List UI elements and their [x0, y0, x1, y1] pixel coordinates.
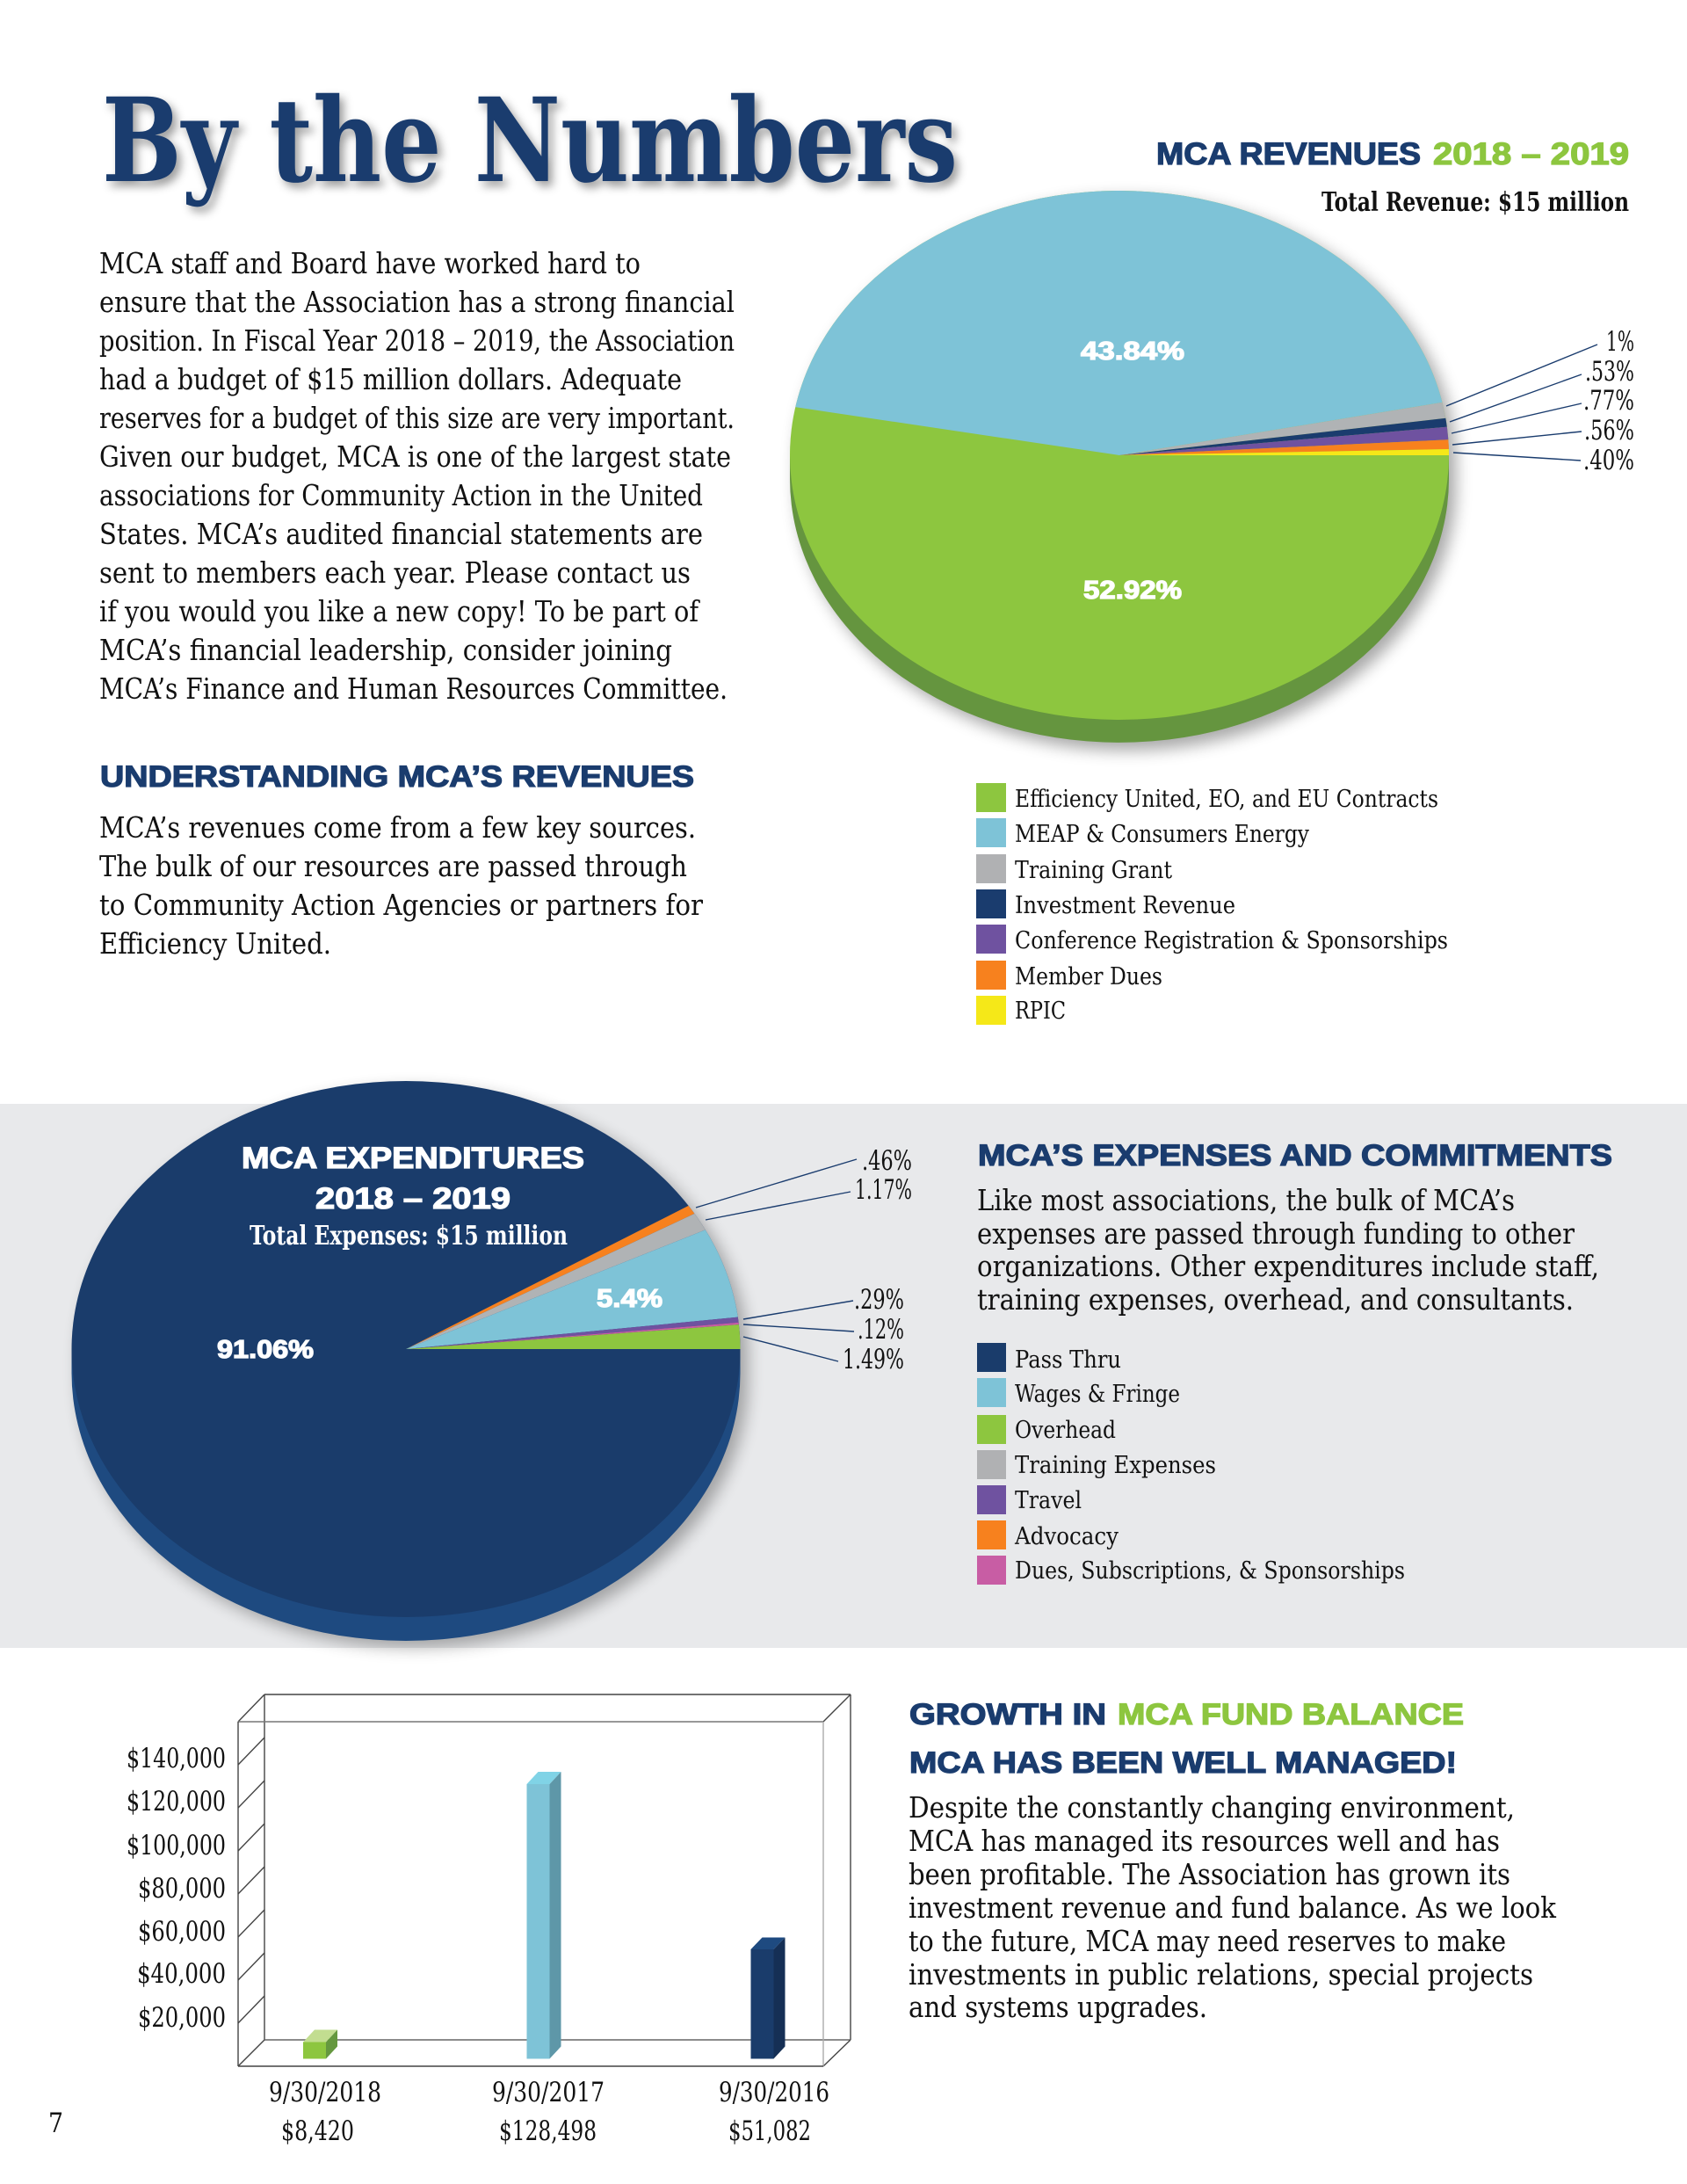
text block: intro: MCA staff and Board have worked hard to — [99, 246, 641, 280]
heading: growth in fund balance: MCA FUND BALANCE — [1118, 1698, 1464, 1731]
chart: expenditures pie — [72, 1081, 844, 1648]
heading: understanding revenues: UNDERSTANDING MCA’S REVENUES — [100, 760, 694, 794]
legend: revenues — [976, 783, 1448, 1025]
text block: intro: associations for Community Action in the United — [99, 478, 703, 512]
axis labels: dates and amounts: $128,498 — [499, 2116, 597, 2147]
legend: expenditures: Wages & Fringe — [1015, 1381, 1180, 1408]
text block: expenses: expenses are passed through funding to other — [977, 1217, 1575, 1251]
callouts: revenue small slices: .77% — [1583, 386, 1634, 417]
text block: growth: to the future, MCA may need reserves to make — [909, 1925, 1506, 1958]
text block: intro: reserves for a budget of this size are very important. — [99, 401, 735, 435]
text block: intro: Given our budget, MCA is one of the largest state — [99, 439, 731, 474]
heading: growth in fund balance: MCA HAS BEEN WELL MANAGED! — [909, 1746, 1457, 1780]
legend: expenditures: Training Expenses — [1015, 1452, 1216, 1479]
legend: expenditures: Dues, Subscriptions, & Sponsorships — [1015, 1557, 1405, 1585]
legend: expenditures: Pass Thru — [1015, 1346, 1121, 1374]
text block: intro: position. In Fiscal Year 2018 – 2019, the Association — [99, 323, 735, 358]
legend: revenues: MEAP & Consumers Energy — [1015, 821, 1310, 848]
text block: growth: been profitable. The Association has grown its — [909, 1858, 1510, 1891]
callouts: expenditure small slices: 1.49% — [843, 1345, 904, 1375]
axis labels: dates and amounts: 9/30/2018 — [269, 2078, 381, 2108]
text block: growth: Despite the constantly changing environment, — [909, 1791, 1515, 1825]
axis labels: dates and amounts: 9/30/2016 — [719, 2078, 829, 2108]
label: 91.06 percent: 91.06% — [217, 1336, 314, 1364]
legend: revenues: Training Grant — [1015, 857, 1172, 884]
callouts: expenditure small slices: .29% — [854, 1285, 904, 1316]
axis labels: dollar values: $80,000 — [138, 1874, 226, 1905]
text block: intro — [99, 246, 735, 706]
label: 5.4 percent: 5.4% — [597, 1285, 662, 1313]
axis labels: dates and amounts: $51,082 — [728, 2116, 811, 2147]
axis labels: dates and amounts — [269, 2078, 829, 2147]
label: 43.84 percent: 43.84% — [1081, 337, 1184, 366]
legend: revenues: Member Dues — [1015, 963, 1162, 990]
chart: fund balance 3D bar chart — [127, 1694, 851, 2147]
legend: revenues: Conference Registration & Sponsorships — [1015, 927, 1448, 954]
heading: expenses and commitments: MCA’S EXPENSES AND COMMITMENTS — [978, 1139, 1612, 1172]
legend: revenues: Investment Revenue — [1015, 892, 1235, 919]
label: 52.92 percent: 52.92% — [1083, 577, 1182, 605]
legend: expenditures: Overhead — [1015, 1417, 1116, 1444]
callouts: revenue small slices: .56% — [1584, 416, 1634, 446]
text block: intro: sent to members each year. Please contact us — [99, 555, 691, 590]
axis labels: dollar values — [127, 1744, 226, 2034]
text block: intro: MCA’s Finance and Human Resources Committee. — [99, 671, 728, 706]
text block: understanding revenues: The bulk of our resources are passed through — [99, 849, 687, 883]
callouts: expenditure small slices: 1.17% — [855, 1175, 912, 1206]
heading: growth in fund balance — [909, 1698, 1464, 1780]
legend: expenditures: Travel — [1015, 1487, 1082, 1514]
text block: understanding revenues: Efficiency United. — [99, 926, 331, 961]
legend: expenditures: Advocacy — [1014, 1523, 1119, 1550]
axis labels: dates and amounts: 9/30/2017 — [492, 2078, 605, 2108]
text block: growth: investments in public relations, special projects — [909, 1958, 1533, 1992]
callouts: revenue small slices: .53% — [1585, 357, 1634, 388]
axis labels: dollar values: $60,000 — [138, 1917, 226, 1948]
bar: 2017 — [527, 1772, 561, 2058]
text block: growth: investment revenue and fund balance. As we look — [909, 1891, 1556, 1925]
axis labels: dollar values: $140,000 — [127, 1744, 226, 1774]
heading: MCA revenues — [1156, 137, 1629, 171]
callouts: revenue small slices: 1% — [1606, 327, 1634, 358]
text block: intro: had a budget of $15 million dollars. Adequate — [99, 362, 682, 396]
text block: intro: if you would you like a new copy! To be part of — [99, 594, 700, 628]
text block: understanding revenues: to Community Action Agencies or partners for — [99, 888, 703, 922]
text block: intro: MCA’s financial leadership, consider joining — [99, 633, 672, 667]
axis labels: dollar values: $100,000 — [127, 1831, 226, 1861]
text block: expenses: training expenses, overhead, and consultants. — [977, 1283, 1574, 1317]
heading: MCA expenditures — [242, 1142, 584, 1215]
callouts: revenue small slices — [1446, 327, 1634, 476]
text block: intro: States. MCA’s audited financial statements are — [99, 517, 703, 551]
axis labels: dollar values: $20,000 — [138, 2003, 226, 2034]
chart frame — [238, 1694, 851, 2066]
panel: expenditures grey band — [0, 1104, 1687, 1648]
axis labels: dollar values: $40,000 — [137, 1959, 226, 1990]
heading: MCA expenditures: MCA EXPENDITURES — [242, 1142, 584, 1175]
legend: revenues: Efficiency United, EO, and EU Contracts — [1015, 786, 1438, 813]
callouts: expenditure small slices — [696, 1146, 912, 1375]
text block: growth — [909, 1791, 1556, 2024]
text block: understanding revenues: MCA’s revenues come from a few key sources. — [99, 810, 696, 845]
text block: growth: MCA has managed its resources well and has — [909, 1825, 1500, 1858]
page number: 7 — [48, 2108, 63, 2139]
axis labels: dates and amounts: $8,420 — [281, 2116, 354, 2147]
callouts: revenue small slices: .40% — [1583, 446, 1634, 476]
text block: intro: ensure that the Association has a strong financial — [99, 285, 735, 319]
text block: understanding revenues — [99, 810, 703, 961]
text block: expenses — [977, 1184, 1599, 1317]
bar: 2018 — [303, 2030, 337, 2058]
chart: revenue pie — [787, 188, 1466, 760]
text block: growth: and systems upgrades. — [909, 1991, 1207, 2024]
axis labels: dollar values: $120,000 — [127, 1787, 226, 1818]
heading: growth in fund balance: GROWTH IN — [909, 1698, 1106, 1731]
callouts: expenditure small slices: .46% — [862, 1146, 912, 1177]
legend: expenditures — [977, 1343, 1405, 1585]
subheading: total expenses: Total Expenses: $15 million — [250, 1221, 568, 1252]
text block: expenses: organizations. Other expenditures include staff, — [977, 1250, 1599, 1283]
legend: revenues: RPIC — [1015, 998, 1066, 1025]
title: By the Numbers — [102, 73, 958, 209]
callouts: expenditure small slices: .12% — [858, 1315, 904, 1346]
text block: expenses: Like most associations, the bulk of MCA’s — [977, 1184, 1515, 1217]
heading: MCA revenues: 2018 – 2019 — [1433, 137, 1629, 171]
bar: 2016 — [750, 1937, 786, 2058]
heading: MCA expenditures: 2018 – 2019 — [315, 1182, 510, 1215]
heading: MCA revenues: MCA REVENUES — [1156, 137, 1421, 171]
